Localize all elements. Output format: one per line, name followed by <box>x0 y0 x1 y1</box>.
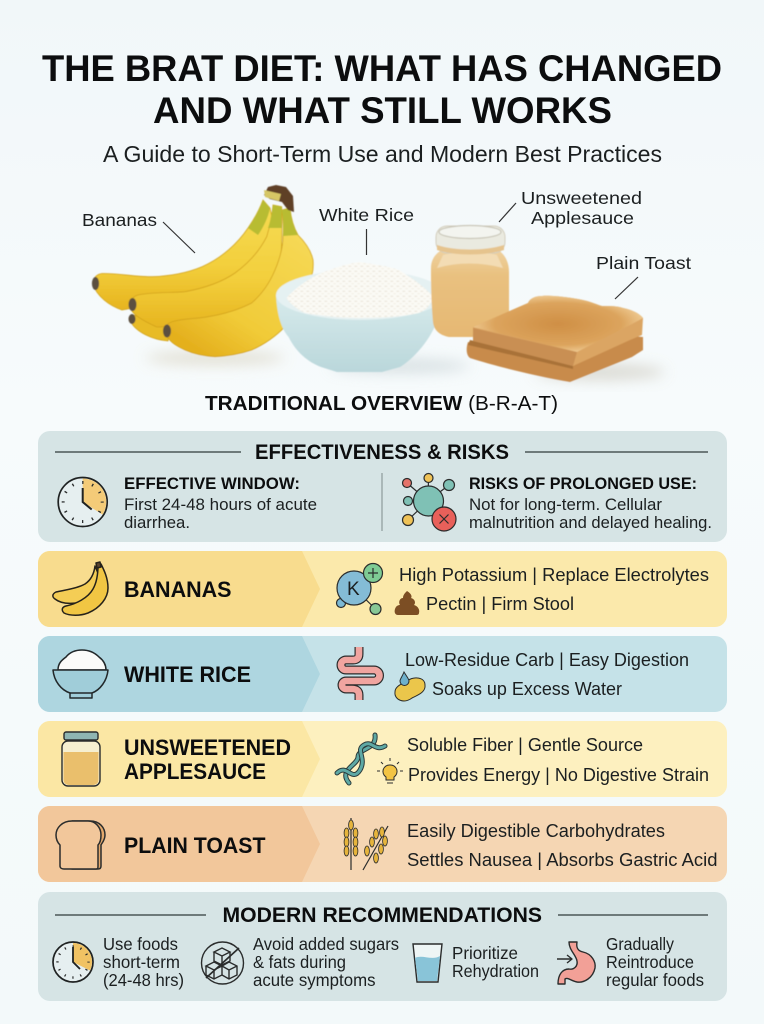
icon: small clock <box>53 942 93 982</box>
text: prioritize rehydration <box>452 943 539 981</box>
applesauce jar <box>431 226 509 337</box>
text: use foods short-term: short-term <box>103 952 180 972</box>
row title: unsweetened applesauce <box>124 735 291 784</box>
panel: bananas <box>38 551 727 627</box>
heading: effectiveness and risks: EFFECTIVENESS & RISKS <box>255 441 509 464</box>
icon: stool <box>395 591 419 615</box>
text: use foods short-term: (24-48 hrs) <box>103 970 184 990</box>
text: effective window: diarrhea. <box>124 513 190 532</box>
icon: fiber strands <box>337 735 385 783</box>
benefit text: applesauce <box>407 735 709 785</box>
text: risks of prolonged use: Not for long-term. Cellular <box>469 495 662 514</box>
icon: potassium molecule <box>336 564 382 614</box>
title: THE BRAT DIET: WHAT HAS CHANGED <box>42 48 722 89</box>
label: plain toast <box>596 253 691 299</box>
text: gradually reintroduce: Reintroduce <box>606 952 694 972</box>
label: unsweetened applesauce <box>499 188 642 228</box>
row title: unsweetened applesauce: APPLESAUCE <box>124 759 266 784</box>
benefit text: white rice <box>405 650 689 699</box>
benefit text: white rice: Soaks up Excess Water <box>432 679 622 699</box>
text: avoid sugars and fats: acute symptoms <box>253 970 376 990</box>
benefit text: bananas: Pectin | Firm Stool <box>426 594 574 614</box>
benefit text: bananas <box>399 565 709 614</box>
text: effective window <box>124 474 317 532</box>
text: avoid sugars and fats: Avoid added sugars <box>253 934 399 954</box>
panel: modern recommendations <box>38 892 727 1001</box>
text: risks of prolonged use: RISKS OF PROLONGED USE: <box>469 474 697 493</box>
row title: plain toast: PLAIN TOAST <box>124 833 266 858</box>
icon: no sugar cubes <box>202 942 244 984</box>
label: bananas: Bananas <box>82 210 157 230</box>
benefit text: plain toast <box>407 821 718 870</box>
icon: light bulb <box>377 758 403 783</box>
benefit text: bananas: High Potassium | Replace Electrolytes <box>399 565 709 585</box>
label: plain toast: Plain Toast <box>596 253 691 273</box>
text: prioritize rehydration: Prioritize <box>452 943 518 963</box>
object shadows <box>145 351 665 380</box>
panel: effectiveness and risks <box>38 431 727 542</box>
icon: potassium molecule: K <box>347 579 360 600</box>
text: gradually reintroduce: regular foods <box>606 970 704 990</box>
text: gradually reintroduce <box>606 934 704 990</box>
row title: unsweetened applesauce: UNSWEETENED <box>124 735 291 760</box>
icon: jar <box>62 732 100 786</box>
row title: bananas: BANANAS <box>124 577 232 602</box>
label: white rice: White Rice <box>319 205 414 225</box>
heading: modern recommendations: MODERN RECOMMENDATIONS <box>222 904 542 927</box>
panel: unsweetened applesauce <box>38 721 727 797</box>
text: avoid sugars and fats <box>253 934 399 990</box>
text: effective window: First 24-48 hours of acute <box>124 495 317 514</box>
icon: stomach with arrow <box>557 942 595 984</box>
text: avoid sugars and fats: & fats during <box>253 952 346 972</box>
panel: plain toast <box>38 806 727 882</box>
row title: white rice: WHITE RICE <box>124 662 251 687</box>
text: prioritize rehydration: Rehydration <box>452 961 539 981</box>
text: risks of prolonged use <box>469 474 712 532</box>
icon: wheat stalks <box>344 818 388 870</box>
benefit text: white rice: Low-Residue Carb | Easy Digestion <box>405 650 689 670</box>
icon: bread slice <box>56 821 105 869</box>
label: white rice <box>319 205 414 255</box>
text: risks of prolonged use: malnutrition and delayed healing. <box>469 513 712 532</box>
panel: white rice <box>38 636 727 712</box>
text: effective window: EFFECTIVE WINDOW: <box>124 474 300 493</box>
icon: clock <box>58 478 107 526</box>
toast slices <box>467 296 643 382</box>
icon: sponge and water drop <box>395 672 425 701</box>
icon: cell molecule with cross <box>402 474 456 531</box>
text: gradually reintroduce: Gradually <box>606 934 674 954</box>
benefit text: plain toast: Settles Nausea | Absorbs Gastric Acid <box>407 850 718 870</box>
text: use foods short-term: Use foods <box>103 934 178 954</box>
benefit text: applesauce: Soluble Fiber | Gentle Source <box>407 735 643 755</box>
icon: banana <box>53 562 108 615</box>
label: unsweetened applesauce: Unsweetened <box>521 188 642 208</box>
label: bananas <box>82 210 195 253</box>
benefit text: applesauce: Provides Energy | No Digestive Strain <box>408 765 709 785</box>
icon: rice bowl <box>53 650 108 698</box>
section heading: traditional overview: TRADITIONAL OVERVIEW (B-R-A-T) <box>205 393 558 415</box>
food photo group <box>92 185 665 382</box>
icon: intestine <box>341 647 380 700</box>
title: AND WHAT STILL WORKS <box>153 90 612 131</box>
title <box>42 48 722 131</box>
label: unsweetened applesauce: Applesauce <box>531 208 634 228</box>
text: use foods short-term <box>103 934 184 990</box>
subtitle: A Guide to Short-Term Use and Modern Best Practices <box>103 141 662 167</box>
icon: glass of water <box>413 944 442 982</box>
rice bowl <box>276 262 444 372</box>
benefit text: plain toast: Easily Digestible Carbohydrates <box>407 821 665 841</box>
banana bunch <box>92 185 313 357</box>
